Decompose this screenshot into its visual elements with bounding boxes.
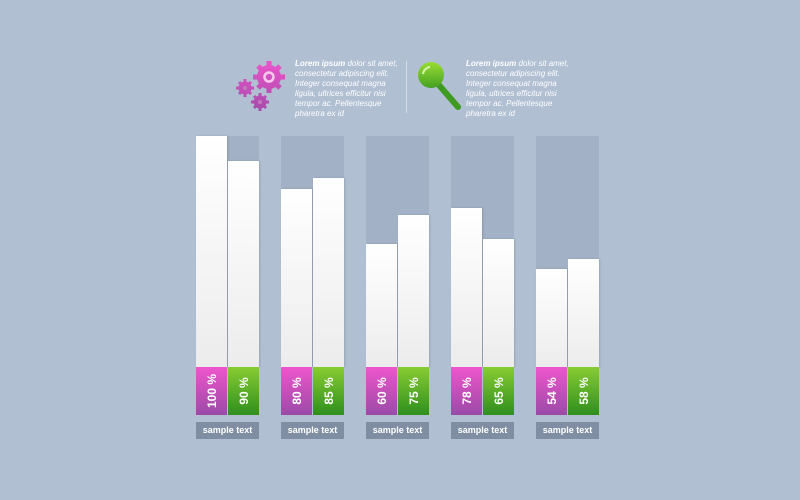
group 1: sample text (203, 425, 252, 435)
text block: left: Lorem ipsum dolor sit amet, consectetur adipiscing elit. Integer consequat magna ligula, ultrices efficitur nisi tempor ac. Pellentesque pharetra ex id (295, 59, 398, 118)
icon: magnifier (418, 62, 461, 110)
group 5: 54 % (544, 377, 558, 405)
group 5: 58 % (576, 377, 590, 405)
group 4 (451, 136, 516, 439)
group 1: 90 % (236, 377, 250, 405)
group 2 (281, 136, 346, 439)
group 2: 80 % (290, 377, 304, 405)
group 3: 75 % (406, 377, 420, 405)
group 4: 65 % (492, 377, 506, 405)
group 4: sample text (458, 425, 507, 435)
text block: right: Lorem ipsum dolor sit amet, consectetur adipiscing elit. Integer consequat magna ligula, ultrices efficitur nisi tempor ac. Pellentesque pharetra ex id (466, 59, 569, 118)
group 3: 60 % (374, 377, 388, 405)
group 3: sample text (373, 425, 422, 435)
group 1: 100 % (204, 374, 218, 408)
group 5 (536, 136, 600, 439)
group 3 (366, 136, 430, 439)
group 2: 85 % (322, 377, 336, 405)
bar chart (196, 136, 600, 439)
group 4: 78 % (460, 377, 474, 405)
group 2: sample text (288, 425, 337, 435)
group 1 (196, 136, 260, 439)
icon: gears (236, 61, 285, 111)
group 5: sample text (543, 425, 592, 435)
